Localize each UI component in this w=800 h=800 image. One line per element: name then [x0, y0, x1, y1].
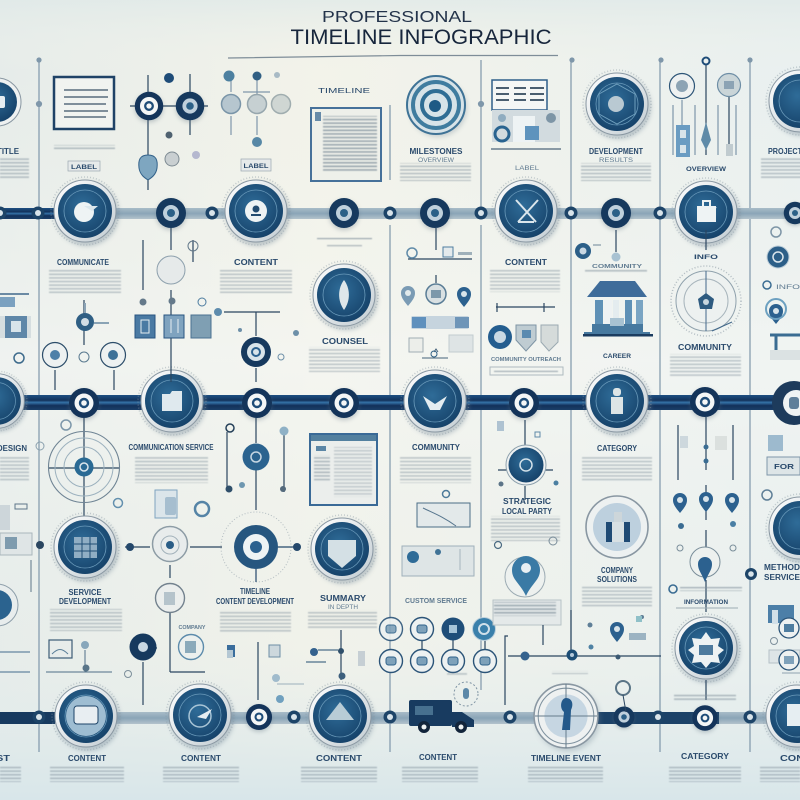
badge: shield	[308, 515, 376, 584]
small icons column 5	[407, 228, 472, 259]
radar dial	[671, 266, 741, 336]
title line 2: TIMELINE INFOGRAPHIC	[290, 26, 552, 49]
right column icons: INFO	[776, 284, 800, 291]
text block column 6	[582, 566, 652, 608]
text block column 2: COMMUNICATION SERVICE	[128, 443, 214, 452]
caption 6: CATEGORY	[681, 752, 730, 761]
badge: target	[407, 76, 467, 137]
left edge badge	[0, 371, 27, 432]
shield row	[488, 303, 563, 375]
text block	[400, 147, 471, 181]
badge: feather	[310, 261, 378, 330]
left column tile	[0, 294, 31, 363]
tag labels	[68, 159, 539, 172]
caption 1: CONTENT	[68, 754, 106, 763]
marker node	[745, 568, 757, 580]
text block column 2	[128, 443, 214, 483]
text block left	[0, 147, 29, 180]
document panel	[54, 77, 114, 129]
caption 7	[760, 754, 800, 782]
text block	[50, 588, 122, 631]
chart panel and caption: CUSTOM SERVICE	[405, 598, 467, 605]
paired nodes	[130, 73, 208, 190]
right badge	[766, 67, 800, 136]
pins cluster	[543, 610, 646, 655]
square tiles	[135, 315, 211, 338]
row three	[0, 417, 800, 612]
text block column 8: COMMUNITY	[678, 343, 733, 352]
medium nodes	[156, 198, 800, 230]
arrow connector	[505, 636, 661, 712]
caption row: INFORMATION	[684, 599, 728, 606]
node with cross	[214, 308, 299, 382]
text block column 5	[400, 443, 471, 483]
target diagram	[36, 418, 122, 540]
text block column 7	[491, 497, 560, 541]
timeline 3 band	[0, 712, 800, 724]
text block column 6	[582, 444, 652, 481]
timeline 2	[0, 367, 800, 436]
text block: TIMELINE	[240, 587, 271, 596]
small nodes	[0, 206, 666, 220]
pin icons	[401, 275, 473, 358]
document panel large	[311, 108, 381, 181]
badge: crosshair figure	[534, 684, 600, 751]
caption 4	[402, 753, 478, 782]
right column: FOR	[774, 464, 794, 471]
caption 4: CONTENT	[419, 753, 457, 762]
badge: bottle	[583, 367, 651, 436]
text block: DEVELOPMENT	[59, 597, 111, 606]
top right ring links	[779, 618, 799, 670]
tag labels: LABEL	[244, 163, 269, 170]
timeline 1 band	[0, 208, 800, 219]
pale node chain: COMPANY	[178, 625, 206, 631]
vertical indicators	[670, 58, 740, 157]
boxed text	[493, 600, 561, 625]
pin in ring	[494, 537, 557, 597]
text block column 6: SOLUTIONS	[597, 575, 638, 584]
caption 2	[163, 754, 239, 782]
caption 5	[528, 754, 603, 782]
text block column 1	[49, 258, 121, 293]
text block column 7: CONTENT	[505, 258, 547, 267]
row four	[0, 496, 800, 712]
right column	[762, 435, 800, 563]
grey nodes	[222, 70, 290, 147]
badge: card	[52, 682, 120, 751]
text block	[216, 587, 294, 633]
tag labels: LABEL	[515, 165, 539, 172]
row two	[0, 227, 800, 390]
text block column 4	[317, 238, 372, 248]
caption 0	[0, 754, 21, 782]
text block: RESULTS	[599, 157, 634, 164]
title line 1: PROFESSIONAL	[322, 9, 472, 26]
timeline 1	[0, 177, 800, 247]
text block: IN DEPTH	[328, 604, 358, 611]
text block column 4 lower	[309, 337, 380, 372]
bottom captions	[0, 752, 800, 782]
text block column 7: LOCAL PARTY	[502, 507, 553, 516]
text block column 3: CONTENT	[234, 258, 278, 267]
text block column 5: COMMUNITY	[412, 443, 461, 452]
ring icons grid	[380, 618, 496, 672]
badge: document right	[763, 682, 800, 751]
text block column 7	[490, 258, 560, 292]
badge: folder	[138, 367, 206, 436]
badge: diamond	[306, 682, 374, 751]
text block column 6 upper	[585, 264, 647, 273]
pale node chain	[125, 526, 222, 705]
caption 1	[50, 754, 124, 782]
text block right	[761, 147, 800, 180]
right column fragments: SERVICE	[764, 573, 800, 582]
nodes column 8 right: INFO	[694, 254, 718, 261]
text block column 4 lower: COUNSEL	[322, 337, 368, 346]
chart panel	[417, 490, 470, 527]
icon rows left	[0, 640, 132, 678]
badge: hexagon	[583, 70, 651, 139]
text block	[581, 147, 651, 181]
text block: CONTENT DEVELOPMENT	[216, 597, 294, 606]
node dark middle	[497, 420, 558, 500]
node with pins	[226, 418, 288, 510]
badge: emblem	[401, 367, 469, 436]
caption 3: CONTENT	[316, 754, 362, 763]
document panel	[310, 434, 377, 505]
left badge	[0, 78, 21, 126]
badge: bubble	[51, 177, 119, 246]
column divider lines	[36, 58, 752, 752]
star badge	[672, 614, 740, 700]
text block: DEVELOPMENT	[589, 147, 643, 156]
tile and swirl	[155, 490, 209, 518]
text block column 8	[670, 343, 741, 376]
badge: cross mark	[492, 177, 560, 246]
text block	[308, 594, 377, 630]
title rule	[228, 56, 558, 58]
caption lines above timeline	[447, 671, 736, 702]
caption 6	[669, 752, 741, 782]
text block column 3	[220, 258, 292, 293]
text block column 7: STRATEGIC	[503, 497, 551, 506]
text block: MILESTONES	[410, 147, 463, 156]
right column icons	[763, 281, 800, 360]
top row	[0, 58, 800, 190]
tag labels: LABEL	[71, 164, 97, 171]
small nodes	[32, 710, 756, 724]
chart panel and caption	[402, 546, 474, 605]
pin in ring right	[677, 545, 736, 582]
caption 2: CONTENT	[181, 754, 221, 763]
badge: arrow	[166, 681, 234, 750]
badge: person	[222, 177, 290, 246]
text block column 1: COMMUNICATE	[57, 258, 110, 267]
right column fragments: METHOD	[764, 563, 800, 572]
collage panel	[491, 80, 561, 150]
left text	[0, 444, 29, 482]
underline	[54, 145, 115, 149]
text block column 6: COMPANY	[601, 566, 634, 575]
heading: timeline: TIMELINE	[318, 86, 370, 95]
connected nodes left	[42, 228, 206, 390]
badge: target halo	[221, 512, 301, 582]
caption 5: TIMELINE EVENT	[531, 754, 601, 763]
pin stems	[673, 417, 739, 612]
truck icon	[409, 682, 478, 733]
nodes column 8 right	[694, 227, 789, 268]
caption 3	[301, 754, 377, 782]
caption row	[669, 585, 742, 608]
badge: grid sheet	[51, 513, 119, 582]
icon row center	[227, 630, 365, 703]
medium nodes	[69, 387, 720, 420]
text block: OVERVIEW	[418, 157, 455, 164]
title	[228, 9, 558, 58]
heading: CAREER	[603, 353, 631, 360]
right edge node	[772, 381, 800, 425]
text: heading: OVERVIEW	[686, 166, 727, 173]
timeline 2 band	[0, 395, 800, 410]
text block: SERVICE	[68, 588, 102, 597]
text block column 6 upper: COMMUNITY	[592, 264, 642, 270]
right column fragments	[764, 563, 800, 673]
badge: box	[672, 178, 740, 247]
text block column 6: CATEGORY	[597, 444, 638, 453]
medium nodes	[246, 704, 718, 732]
building icon	[583, 281, 653, 336]
nodes column 6	[575, 230, 620, 262]
left fragments	[0, 504, 44, 626]
timeline 3	[0, 681, 800, 751]
shield row: COMMUNITY OUTREACH	[491, 357, 561, 363]
caption 7: CON	[780, 754, 800, 763]
text block: SUMMARY	[320, 594, 367, 603]
pale bottle badge	[586, 496, 648, 558]
